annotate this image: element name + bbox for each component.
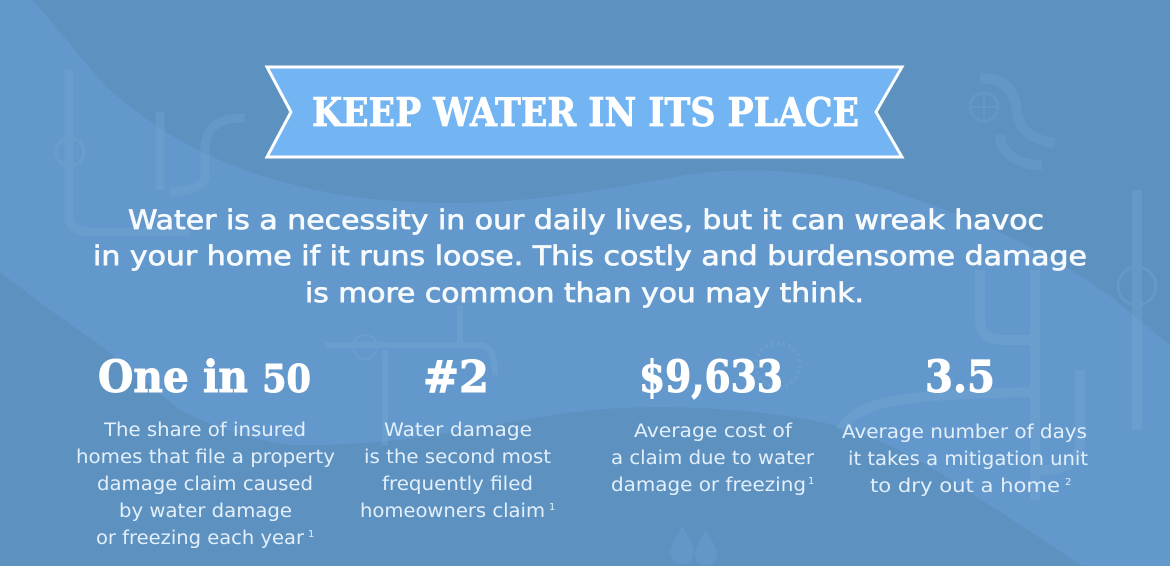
stat description: homes that file a property <box>76 447 335 468</box>
stat description <box>76 420 335 549</box>
title: KEEP WATER IN ITS PLACE <box>312 90 859 136</box>
stat description: damage or freezing <box>611 475 806 496</box>
stat description <box>611 421 814 496</box>
stat description: by water damage <box>119 501 292 522</box>
stat: 3.5 <box>842 352 1088 497</box>
stat description: 1 <box>308 529 314 540</box>
intro paragraph: Water is a necessity in our daily lives, but it can wreak havoc <box>128 205 1044 236</box>
icon: gear <box>756 343 800 387</box>
intro paragraph: in your home if it runs loose. This costly and burdensome damage <box>93 241 1087 272</box>
stat description: to dry out a home <box>870 476 1060 497</box>
stat number: #2 <box>423 352 489 403</box>
icon: faucet centre left <box>325 305 495 445</box>
stat description: damage claim caused <box>97 474 313 495</box>
stat number: $9,633 <box>639 352 783 403</box>
stat description: frequently filed <box>382 474 533 495</box>
stat: #2 <box>360 352 555 522</box>
stat description: is the second most <box>364 447 551 468</box>
stat description: or freezing each year <box>96 528 304 549</box>
stat description: Average cost of <box>634 421 793 442</box>
stat description: a claim due to water <box>611 448 814 469</box>
stat description: Water damage <box>384 420 532 441</box>
banner ribbon <box>267 67 902 157</box>
stat description: 2 <box>1065 477 1071 488</box>
stat number: One in 50 <box>98 352 311 403</box>
stat: one in 50 <box>76 352 335 549</box>
stat description: The share of insured <box>103 420 306 441</box>
icon: pipes upper left <box>56 70 245 232</box>
stat description: homeowners claim <box>360 501 545 522</box>
icon: water drops <box>670 526 717 566</box>
title banner <box>267 67 902 157</box>
stat description: it takes a mitigation unit <box>848 449 1088 470</box>
stat description: 1 <box>808 476 814 487</box>
icon: valve and pipes upper right <box>970 78 1055 165</box>
stat description <box>842 422 1088 497</box>
icon: pipes right <box>840 190 1156 500</box>
intro paragraph: is more common than you may think. <box>305 278 864 309</box>
stat description: 1 <box>549 502 555 513</box>
stat description <box>360 420 555 522</box>
stat number: 3.5 <box>925 352 995 403</box>
stat: $9,633 <box>611 352 814 496</box>
stat description: Average number of days <box>842 422 1087 443</box>
intro paragraph <box>93 205 1087 309</box>
